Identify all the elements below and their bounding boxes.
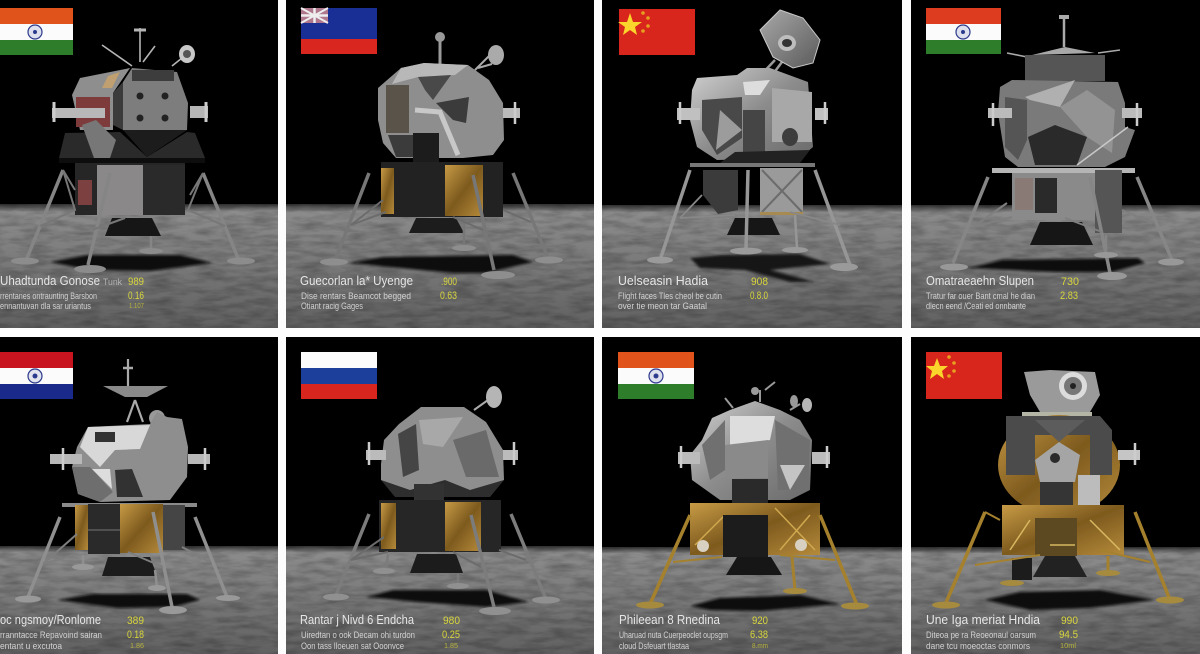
sky bbox=[0, 337, 278, 654]
caption: 908 bbox=[751, 276, 768, 288]
icon: flag of India bbox=[926, 8, 1001, 54]
caption: Tratur far ouer Bant cmal he dian bbox=[926, 291, 1035, 302]
caption: 0.25 bbox=[442, 629, 460, 641]
caption: entant u excutoa bbox=[0, 641, 63, 652]
caption: Omatraeaehn Slupen bbox=[926, 273, 1034, 288]
caption: dlecn eend /Ceati ed onnbante bbox=[926, 301, 1026, 312]
panel: lander 8 bbox=[911, 337, 1200, 654]
caption: 989 bbox=[128, 276, 144, 288]
icon: flag of China bbox=[926, 352, 1002, 399]
panel: lander 7 bbox=[602, 337, 902, 654]
sky bbox=[911, 0, 1200, 328]
caption bbox=[0, 273, 144, 312]
ground texture bbox=[286, 204, 594, 328]
caption bbox=[0, 612, 144, 652]
lunar ground bbox=[286, 204, 594, 328]
caption: dane tcu moeoctas conmors bbox=[926, 641, 1030, 652]
caption: Uharuad nuta Cuerpeoclet oupsgm bbox=[619, 630, 728, 641]
lunar lander bbox=[323, 386, 560, 615]
lunar ground bbox=[602, 205, 902, 328]
caption: Oon tass lloeuen sat Ooonvce bbox=[301, 641, 404, 652]
icon: flag of China bbox=[618, 9, 695, 55]
caption: oc ngsmoy/Ronlome bbox=[0, 612, 101, 627]
caption: .900 bbox=[441, 276, 457, 288]
lunar ground bbox=[0, 546, 278, 654]
caption: over tie meon tar Gaatal bbox=[618, 301, 707, 312]
lunar lander bbox=[932, 370, 1184, 608]
panel: lander 6 bbox=[286, 337, 594, 654]
caption: 0.16 bbox=[128, 290, 144, 302]
sky bbox=[911, 337, 1200, 654]
ground texture bbox=[911, 205, 1200, 328]
sky bbox=[286, 0, 594, 328]
caption: Une Iga meriat Hndia bbox=[926, 612, 1041, 627]
caption: 1.85 bbox=[444, 643, 458, 650]
lunar lander bbox=[940, 15, 1184, 280]
caption: 8.mm bbox=[752, 643, 768, 650]
lunar ground bbox=[286, 546, 594, 654]
lunar ground bbox=[602, 547, 902, 654]
caption: 730 bbox=[1061, 276, 1079, 288]
caption bbox=[300, 612, 460, 652]
lunar lander bbox=[11, 28, 255, 273]
caption: 2.83 bbox=[1060, 290, 1078, 302]
lunar ground bbox=[0, 204, 278, 328]
caption bbox=[619, 612, 768, 652]
sky bbox=[286, 337, 594, 654]
caption bbox=[926, 273, 1079, 312]
shadow bbox=[690, 595, 840, 611]
icon: flag of Russia bbox=[301, 352, 377, 399]
panel: lander 1 bbox=[0, 0, 278, 328]
icon: flag of India bbox=[618, 352, 694, 399]
caption: Diteoa pe ra Reoeonaul oarsum bbox=[926, 630, 1036, 641]
caption: 10ml bbox=[1060, 643, 1076, 650]
caption: Uiredtan o ook Decam ohi turdon bbox=[301, 630, 415, 641]
ground texture bbox=[0, 204, 278, 328]
lunar ground bbox=[911, 547, 1200, 654]
lunar ground bbox=[911, 205, 1200, 328]
caption: rrentanes ontraunting Barsbon bbox=[0, 291, 97, 302]
caption: 0.63 bbox=[440, 290, 457, 302]
caption bbox=[618, 273, 768, 312]
caption: 1.86 bbox=[130, 643, 144, 650]
lunar lander bbox=[636, 382, 869, 610]
caption: 990 bbox=[1061, 615, 1078, 627]
ground texture bbox=[602, 547, 902, 654]
sky bbox=[602, 0, 902, 328]
shadow bbox=[57, 594, 200, 608]
caption: 6.38 bbox=[750, 629, 768, 641]
panel: lander 4 bbox=[911, 0, 1200, 328]
caption: Rantar j Nivd 6 Endcha bbox=[300, 612, 415, 627]
caption: Uhadtunda Gonose bbox=[0, 273, 100, 288]
shadow bbox=[50, 255, 213, 271]
panel: lander 2 bbox=[286, 0, 594, 328]
icon: flag blue and red with union corner bbox=[301, 8, 377, 54]
lunar lander bbox=[320, 32, 563, 279]
shadow bbox=[349, 255, 533, 273]
shadow bbox=[985, 590, 1155, 610]
lunar lander bbox=[15, 359, 240, 614]
ground texture bbox=[911, 547, 1200, 654]
caption: Guecorlan la* Uyenge bbox=[300, 273, 413, 288]
ground texture bbox=[286, 546, 594, 654]
caption: Flight faces Tles cheol be cutin bbox=[618, 291, 722, 302]
caption: 980 bbox=[443, 615, 460, 627]
shadow bbox=[690, 254, 830, 282]
caption: Dise rentars Beamcot begged bbox=[301, 291, 411, 302]
caption: ennantuvan dla sar uriantus bbox=[0, 301, 91, 312]
panel: lander 5 bbox=[0, 337, 278, 654]
caption: Tunk bbox=[103, 277, 122, 288]
caption: Phileean 8 Rnedina bbox=[619, 612, 721, 627]
ground texture bbox=[0, 546, 278, 654]
caption bbox=[926, 612, 1078, 652]
ground texture bbox=[602, 205, 902, 328]
caption bbox=[300, 273, 457, 312]
caption: 0.18 bbox=[127, 629, 144, 641]
shadow bbox=[366, 590, 529, 607]
shadow bbox=[968, 258, 1145, 272]
caption: Otiant racig Gages bbox=[301, 301, 363, 312]
sky bbox=[602, 337, 902, 654]
caption: rranntacce Repavoind sairan bbox=[0, 630, 102, 641]
icon: flag red white blue with wheel bbox=[0, 352, 73, 399]
caption: Uelseasin Hadia bbox=[618, 273, 709, 288]
caption: 389 bbox=[127, 615, 144, 627]
icon: flag of India bbox=[0, 8, 73, 55]
caption: 920 bbox=[752, 615, 768, 627]
panel: lander 3 bbox=[602, 0, 902, 328]
caption: 94.5 bbox=[1059, 629, 1078, 641]
sky bbox=[0, 0, 278, 328]
caption: cloud Dsfeuart tlastaa bbox=[619, 641, 690, 652]
caption: 0.8.0 bbox=[750, 290, 768, 302]
lunar lander bbox=[647, 10, 858, 271]
caption: 1.107 bbox=[129, 303, 144, 310]
